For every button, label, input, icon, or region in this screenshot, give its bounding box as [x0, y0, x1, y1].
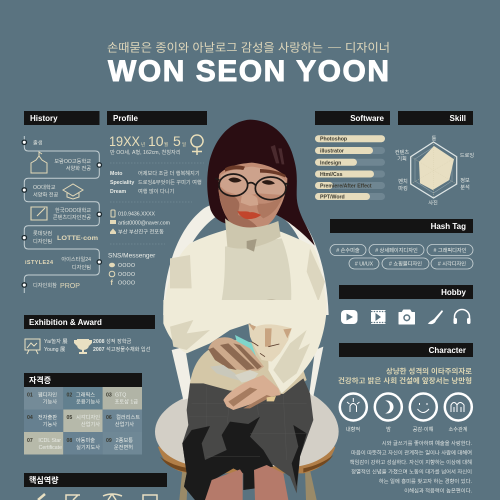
birth date: 10	[148, 133, 164, 149]
title: tagline and name	[107, 40, 390, 88]
radar labels: 툴	[432, 135, 437, 142]
history entries: iSTYLE24	[25, 260, 54, 266]
sns messenger: f	[110, 280, 114, 287]
character trait circles	[340, 394, 472, 420]
icon: presentation board	[25, 339, 40, 354]
panel: hobby	[339, 285, 473, 324]
birth date: 5	[173, 133, 181, 149]
hash tag text: # 쇼핑몰디자인	[389, 260, 422, 268]
certificate grid: 운용기능사	[76, 398, 100, 406]
character description: 마음이 따뜻하고 자신이 관계하는 일이나 사람에 대해여	[351, 448, 472, 456]
sns messenger: OOOO	[118, 280, 135, 286]
panel: software	[315, 111, 390, 200]
personal motto list	[110, 169, 202, 195]
certificate grid: 기능사	[43, 398, 57, 406]
radar labels: 컨텐츠	[395, 149, 409, 156]
history entries: OO대학교	[33, 183, 56, 191]
history entries: 서양화 전공	[33, 190, 59, 198]
contact details: 부산 부산진구 전포동	[118, 228, 164, 236]
certificate grid	[24, 387, 142, 454]
radar labels: 벤치	[398, 177, 408, 185]
icon: graduation cap	[63, 184, 83, 199]
icon: video play	[341, 310, 358, 324]
character description: 이해심과 적응력이 높은편이다.	[404, 486, 472, 494]
character description	[350, 439, 472, 494]
history entries: 콘텐츠디자인전공	[53, 213, 91, 221]
contact details	[110, 210, 170, 236]
heading: hobby: Hobby	[441, 288, 467, 297]
hash tag text: # 시각디자인	[438, 260, 466, 268]
history entries: 아이스타일24	[61, 255, 91, 263]
heading: software: Software	[350, 114, 385, 123]
heading: character	[339, 343, 473, 357]
software skill bars: Html/Css	[320, 172, 343, 178]
certificate grid: 04	[27, 415, 33, 421]
certificate grid: 컬러리스트	[116, 413, 140, 421]
core skill icons	[38, 494, 157, 500]
character headline	[338, 366, 473, 385]
personal motto list: 드로잉&무엇이든 꾸미기 여행	[138, 178, 202, 186]
history entries	[25, 138, 98, 290]
certificate grid: 포토샵 1급	[115, 398, 138, 406]
sns messenger	[108, 252, 156, 287]
radar chart	[411, 142, 457, 198]
heading: core skills	[24, 473, 167, 487]
certificate grid: 07	[27, 438, 33, 444]
panel: character	[338, 343, 473, 494]
certificate grid: 기능사	[43, 420, 57, 428]
hash tag pills	[330, 244, 473, 269]
personal motto list: Moto	[110, 171, 122, 177]
hash tag text: # 그래픽디자인	[434, 246, 467, 254]
history entries: 출생	[33, 138, 43, 146]
sns messenger: OOOO	[118, 272, 135, 278]
certificate grid: Certificate	[39, 445, 62, 451]
certificate grid: 08	[66, 438, 72, 444]
certificate grid: 05	[66, 415, 72, 421]
history entries: 한국OOO대학교	[55, 206, 91, 214]
hash tag text: # UI/UX	[355, 262, 374, 268]
heading: profile	[107, 111, 207, 125]
icon: camera	[399, 310, 414, 324]
software skill bars: PPT/Word	[320, 194, 345, 200]
trait labels: 내향적	[346, 425, 360, 433]
certificate grid: 운전면허	[114, 443, 133, 451]
certificate grid: 웹디자인	[38, 390, 57, 398]
panel: profile	[107, 111, 207, 287]
certificate grid: 시각디자인	[76, 413, 100, 421]
birth date: 월	[164, 141, 168, 148]
character headline: 건강하고 밝은 사회 건설에 앞장서는 낭만형	[338, 376, 472, 385]
illustration: seated woman with cat on a chair	[155, 120, 339, 500]
radar labels: 기획	[397, 154, 407, 162]
icon: headphones	[454, 310, 470, 324]
title: tagline and name: 손때묻은 종이와 아날로그 감성을 사랑하는	[107, 40, 323, 54]
trait labels: 공감·이해	[413, 425, 434, 433]
panel: skill radar	[395, 111, 474, 206]
panel: profile: 만 OO세, A형, 162cm, 천칭자리	[110, 148, 181, 156]
trait labels: 밤	[386, 425, 391, 433]
software skill bars: Premiere/After Effect	[320, 184, 372, 190]
timeline path	[24, 136, 99, 293]
panel: history	[22, 111, 102, 293]
heading: hash tag	[330, 219, 473, 233]
panel: exhibition and award: 2007 석고정물수채화 입선	[93, 345, 151, 353]
hash tag text	[336, 246, 467, 268]
heading: hash tag: Hash Tag	[431, 222, 466, 231]
contact details: artist0000@naver.com	[118, 220, 170, 226]
title: tagline and name: WON SEON YOON	[108, 55, 389, 88]
radar labels	[395, 135, 474, 206]
icon: female symbol	[191, 135, 203, 155]
certificate grid: 아동미술	[76, 436, 95, 444]
birth date: 19XX	[109, 133, 141, 149]
certificate grid: 산업기사	[115, 420, 134, 428]
software skill bars: Indesign	[320, 160, 341, 166]
character description: 하는 일에 흥미를 찾고자 하는 경향이 있다.	[379, 477, 472, 485]
personal motto list: 어제보다 조금 더 행복해지기	[138, 169, 200, 177]
certificate grid: 01	[27, 392, 33, 398]
birth date: 일	[182, 141, 186, 147]
personal motto list: Speciality	[110, 180, 134, 186]
title: tagline and name: 디자이너	[345, 42, 390, 54]
certificate grid: 03	[106, 392, 112, 398]
heading: core skills: 핵심역량	[29, 475, 59, 485]
radar labels: 사진	[428, 198, 438, 206]
radar labels: 분석	[460, 183, 470, 191]
face	[215, 163, 289, 232]
history entries: PROP	[60, 281, 80, 290]
panel: certificates	[24, 373, 142, 454]
certificate grid: ICDL Star	[38, 438, 61, 444]
radar labels: 마킹	[398, 184, 408, 192]
trait labels: 소수관계	[448, 425, 468, 433]
history entries: LOTTE·com	[57, 235, 98, 242]
sns messenger: OOOO	[118, 263, 135, 269]
panel: core skills	[24, 473, 167, 500]
software skill bars: Photoshop	[320, 137, 347, 143]
certificate grid: 06	[106, 415, 112, 421]
icon: school	[31, 152, 47, 173]
radar labels: 드로잉	[460, 152, 474, 159]
heading: history	[24, 111, 100, 125]
birth date: 년	[141, 141, 145, 147]
heading: character: Character	[429, 346, 466, 355]
software skill bars	[315, 135, 385, 200]
icon: film	[371, 310, 386, 324]
panel: exhibition and award	[24, 315, 155, 354]
icon: drawing tablet	[31, 207, 47, 220]
trait labels	[346, 425, 468, 433]
history entries: 롯데닷컴	[33, 229, 52, 237]
panel: exhibition and award: 2008 성적 장학금	[93, 337, 132, 345]
hash tag text: # 손수미술	[336, 246, 360, 254]
history entries: 디자인회참	[33, 281, 57, 289]
personal motto list: Dream	[110, 189, 127, 195]
software skill bars: illustrator	[320, 148, 344, 154]
timeline dots	[22, 140, 102, 287]
hash tag text: # 상세페이지디자인	[375, 246, 418, 254]
certificate grid: 산업기사	[81, 420, 100, 428]
cat and hands	[208, 323, 292, 410]
radar labels: 정보	[460, 177, 470, 184]
icon: trophy	[74, 339, 92, 354]
character description: 시와 글쓰기를 좋아하며 예술을 사랑한다.	[382, 439, 472, 447]
certificate grid: 09	[106, 438, 112, 444]
certificate grid: 02	[66, 392, 72, 398]
heading: skill: Skill	[450, 114, 466, 123]
sns messenger: SNS/Messenger	[108, 252, 156, 260]
heading: history: History	[30, 114, 58, 123]
certificate grid: 2종보통	[116, 437, 133, 444]
heading: certificates: 자격증	[29, 375, 52, 385]
certificate grid: 전자출판	[38, 413, 57, 421]
heading: exhibition: Exhibition & Award	[29, 318, 102, 327]
panel: exhibition and award: Ya/놀자 展	[44, 337, 68, 345]
trait icons	[347, 398, 464, 413]
panel: exhibition and award: Young 展	[44, 346, 65, 353]
history entries: 디자인팀	[72, 263, 91, 271]
contact details: 010.9436.XXXX	[118, 212, 155, 218]
certificate grid: GTQ	[115, 392, 126, 398]
character headline: 상냥한 성격의 이타주의자로	[386, 366, 473, 376]
birth date	[109, 133, 186, 149]
certificate grid: 그래픽스	[76, 390, 95, 398]
certificate grid: 실기지도사	[76, 443, 100, 451]
personal motto list: 여행 많이 다니기	[138, 187, 175, 195]
history entries: 디자인팀	[33, 237, 52, 245]
history entries: 보람OO고등학교	[54, 157, 91, 165]
icon: paint brush	[428, 310, 443, 324]
panel: hash tags	[330, 219, 473, 269]
character description: 정열적인 신념을 가졌으며 노동의 대가를 넘어서 자신이	[351, 468, 472, 476]
heading: profile: Profile	[113, 114, 138, 123]
history entries: 서양화 전공	[66, 164, 91, 172]
character description: 책임감이 강하고 성실하다. 자신이 지향하는 이상에 대해	[350, 458, 472, 466]
